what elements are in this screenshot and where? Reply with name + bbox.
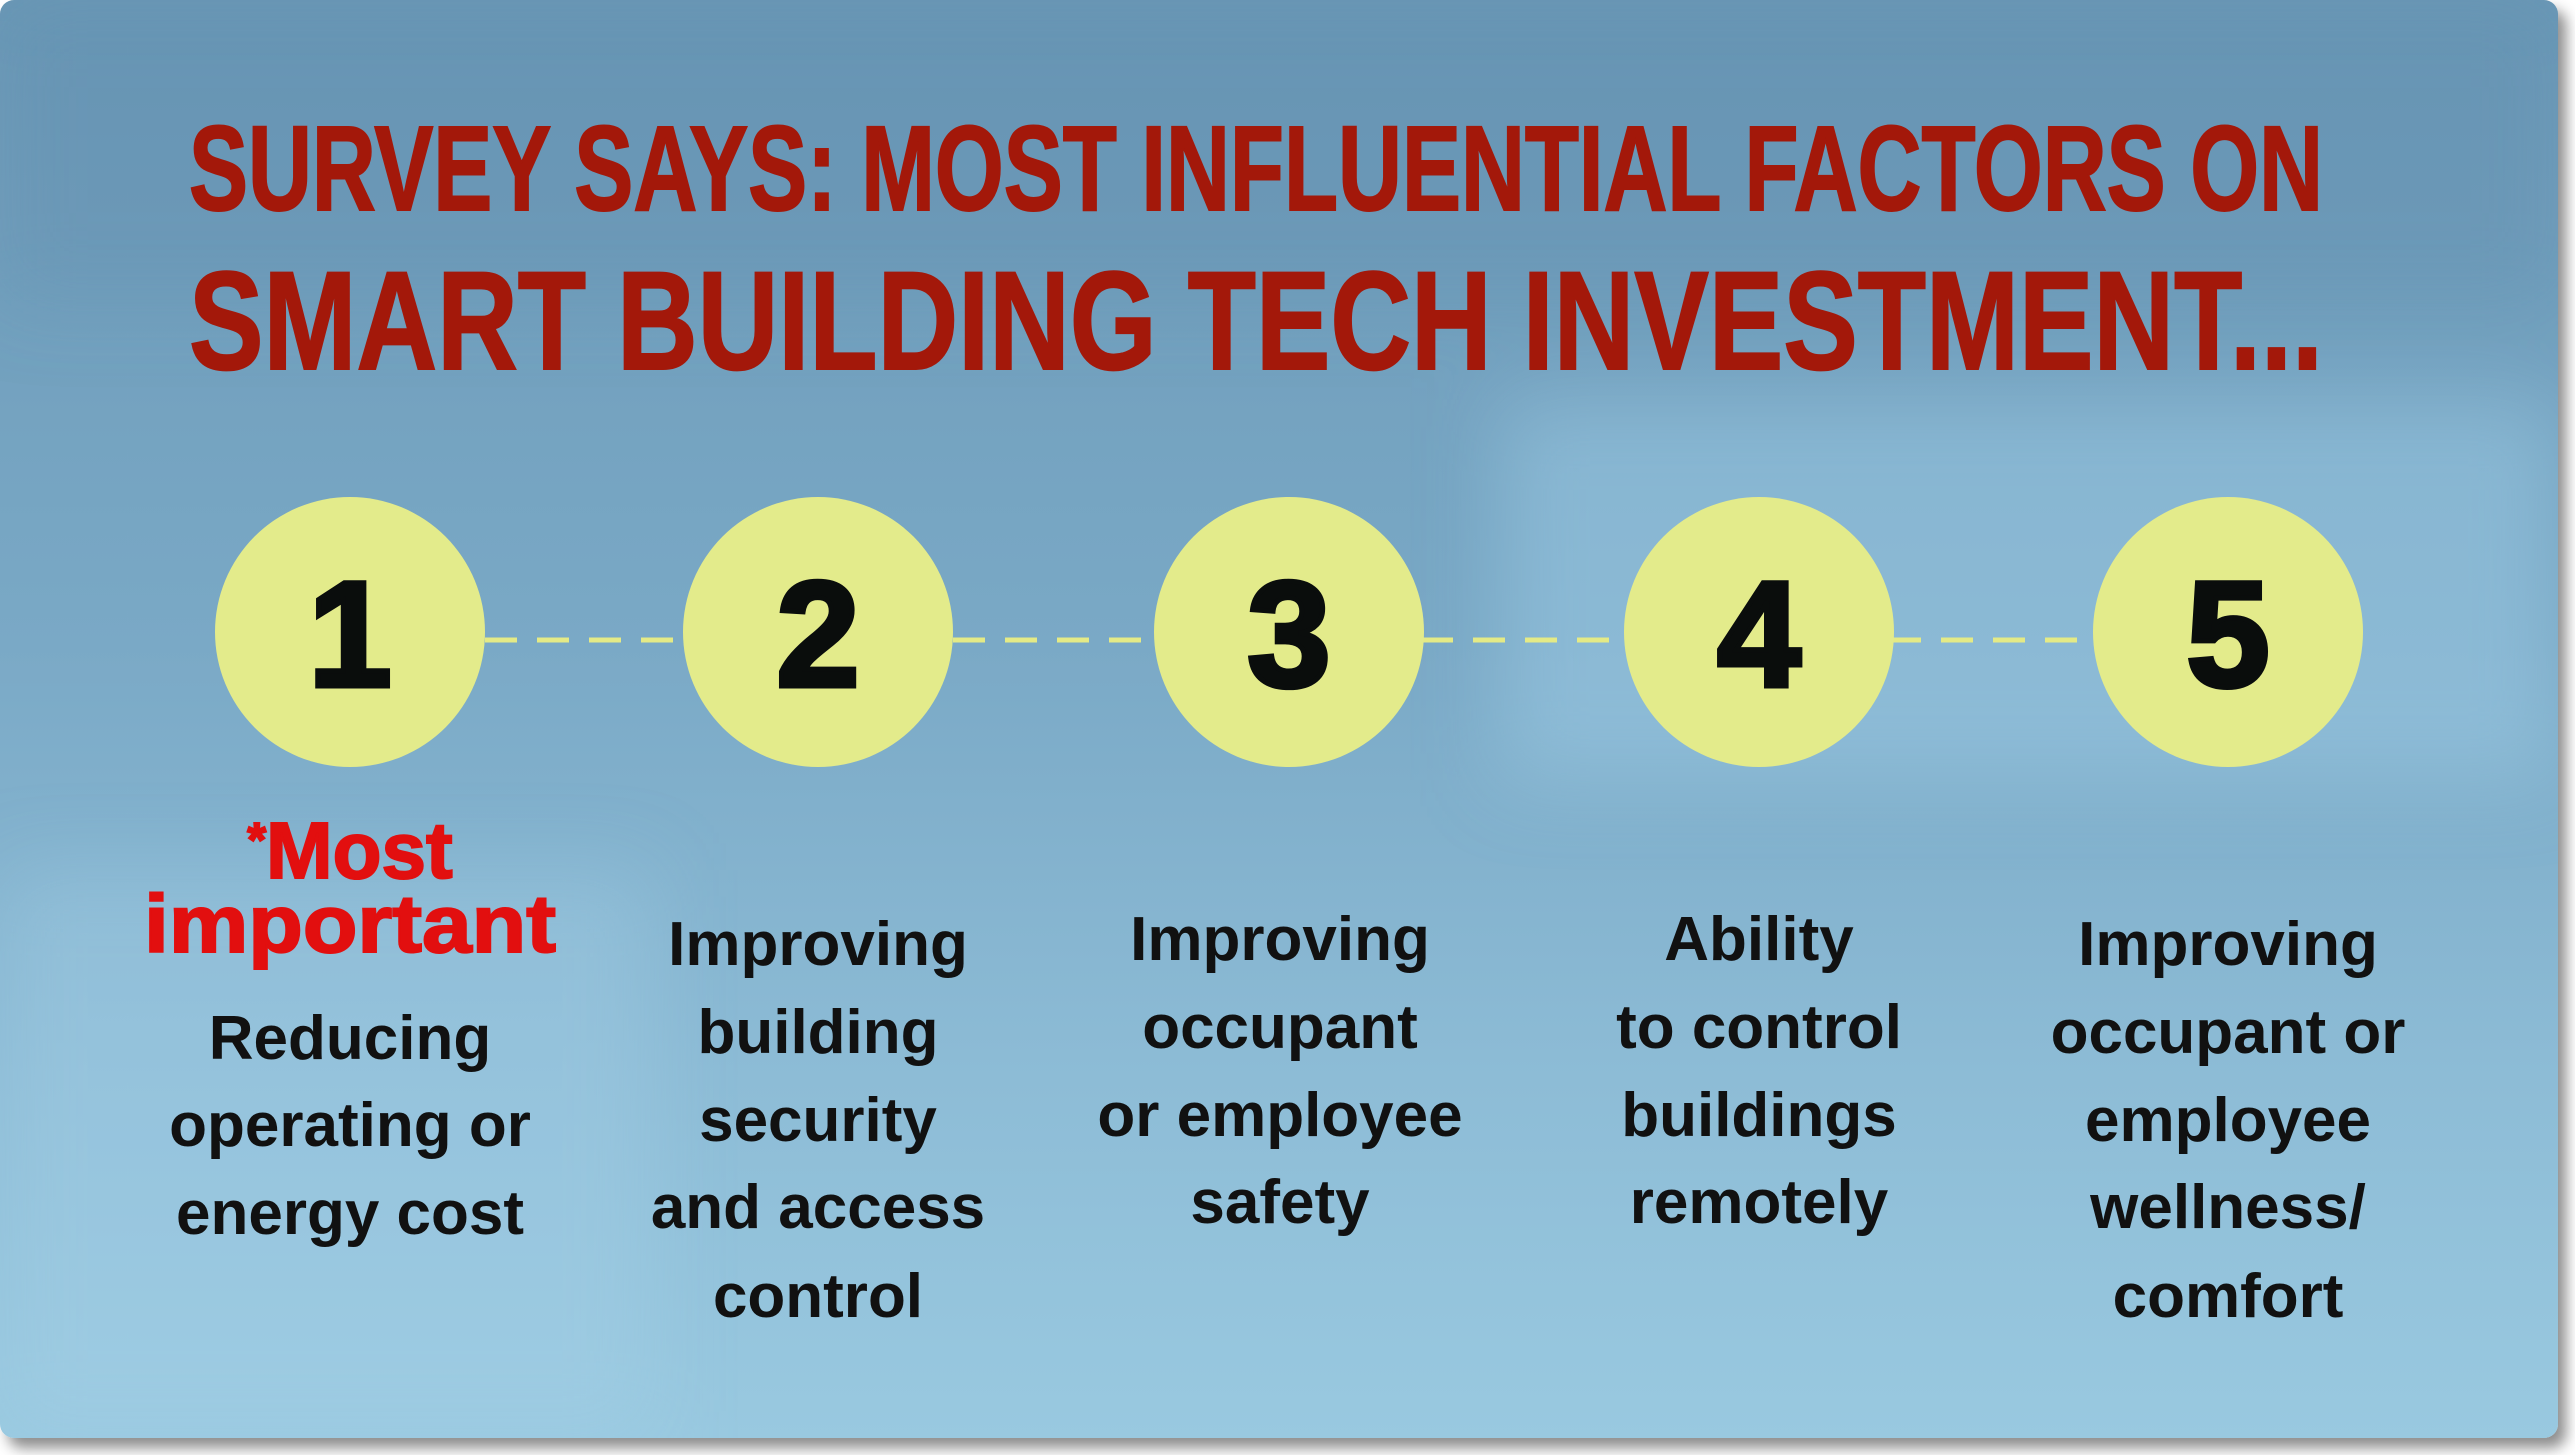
callout: most important: Most [266,806,453,895]
circle 2: 2 [776,550,860,718]
label 3 [1097,905,1463,1237]
label 1 [169,1004,531,1248]
label 2: Improving [668,910,968,979]
label 5: comfort [2113,1262,2343,1331]
dashed connector line [485,638,2095,642]
label 3: or employee [1097,1081,1463,1150]
title [189,100,2323,399]
circle 2 [683,497,953,767]
label 4: to control [1616,993,1902,1062]
label 4: Ability [1664,905,1854,974]
label 5: wellness/ [2089,1173,2366,1242]
circle 4: 4 [1717,550,1801,718]
label 4: remotely [1630,1168,1889,1237]
label 4: buildings [1621,1081,1897,1150]
label 2: security [699,1086,937,1155]
factor labels [169,905,2405,1331]
label 5: Improving [2078,910,2378,979]
label 1: operating or [169,1091,531,1160]
callout: most important: important [144,879,556,970]
callout: most important [144,806,556,970]
label 3: safety [1190,1168,1370,1237]
label 3: Improving [1130,905,1430,974]
number circles [215,497,2363,767]
label 2: building [697,998,939,1067]
callout: most important: * [247,814,266,867]
label 2: control [713,1262,923,1331]
label 5: employee [2085,1086,2371,1155]
label 1: energy cost [176,1179,524,1248]
label 2 [651,910,985,1331]
label 1: Reducing [209,1004,491,1073]
circle 3: 3 [1247,550,1331,718]
circle 5: 5 [2186,550,2270,718]
circle 3 [1154,497,1424,767]
label 5: occupant or [2051,998,2405,1067]
label 2: and access [651,1173,985,1242]
label 3: occupant [1142,993,1418,1062]
circle 1: 1 [308,550,392,718]
label 4 [1616,905,1902,1237]
circle 4 [1624,497,1894,767]
circle 5 [2093,497,2363,767]
label 5 [2051,910,2405,1331]
circle 1 [215,497,485,767]
